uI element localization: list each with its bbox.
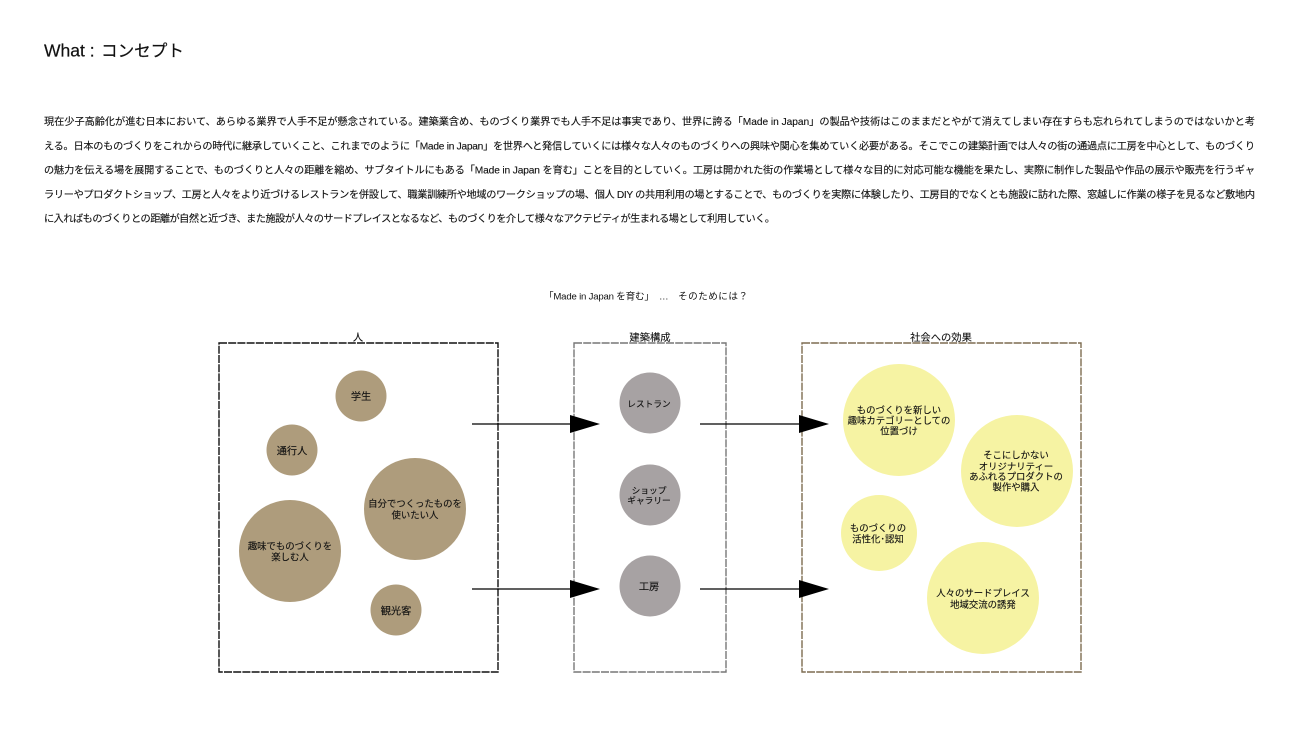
body text block [44,115,1255,225]
circle: passers-by: 通行人 [277,444,307,458]
circle: students [336,370,386,422]
circle: restaurant [620,372,680,434]
diagram question heading [544,290,748,302]
arrow: people to restaurant [472,415,600,433]
circle: workshop: 工房 [639,581,659,593]
body text block: ラリーやプロダクトショップ、工房と人々をより近づけるレストランを併設して、職業訓練所や地域のワークショップの場、個人 DIY の共用利用の場とすることで、ものづくりを実際に体験したり、工房目的でなくとも施設に訪れた際、窓越しに作業の様子を見るなど敷地内 [44,188,1255,201]
circle: tourists: 観光客 [381,604,411,618]
diagram question heading: そのためには？ [678,292,748,302]
circle: original products: オリジナリティー [979,461,1053,472]
diagram question heading: 「Made in Japan を育む」 [544,290,654,302]
circle: third place: 地域交流の誘発 [950,599,1016,610]
title: コンセプト [101,42,184,60]
circle: hobby makers [239,500,341,602]
body text block: 現在少子高齢化が進む日本において、あらゆる業界で人手不足が懸念されている。建築業含め、ものづくり業界でも人手不足は事実であり、世界に誇る「Made in Japan」の製品や技術はこのままだとやがて消えてしまい存在すらも忘れられてしまうのではないかと考 [44,115,1255,128]
circle: new hobby category: 位置づけ [880,426,918,436]
circle: third place: 人々のサードプレイス [936,588,1030,598]
circle: tourists [370,584,422,636]
circle: people who want to use what they make: 自分でつくったものを [368,498,462,509]
panel heading: architectural composition: 建築構成 [629,331,671,344]
circle: new hobby category: ものづくりを新しい [857,404,941,416]
circle: students: 学生 [351,390,371,403]
arrow: workshop to effects [700,580,829,598]
circle: original products [961,415,1073,527]
panel heading: people: 人 [353,332,364,344]
body text block: える。日本のものづくりをこれからの時代に継承していくこと、これまでのように「Made in Japan」を世界へと発信していくには様々な人々のものづくりへの興味や関心を集めていく必要がある。そこでこの建築計画では人々の街の通過点に工房を中心として、ものづくり [44,139,1255,152]
circle: new hobby category [843,364,955,476]
diagram question heading: … [659,292,669,302]
circle: people who want to use what they make: 使いたい人 [392,510,439,520]
circle: original products: 製作や購入 [993,482,1040,492]
circle: restaurant: レストラン [627,399,671,409]
circle: original products: あふれるプロダクトの [969,471,1063,482]
title: What : [44,40,95,60]
circle: third place [927,542,1039,654]
circle: revitalization and awareness [841,495,917,571]
circle: original products: そこにしかない [983,450,1049,460]
circle: revitalization and awareness: 活性化･認知 [852,534,904,544]
body text block: に入ればものづくりとの距離が自然と近づき、また施設が人々のサードプレイスとなるなど、ものづくりを介して様々なアクテビティが生まれる場として利用していく。 [44,212,775,225]
panel: architectural composition [574,331,726,672]
circle: hobby makers: 楽しむ人 [271,551,309,562]
panel heading: social effects: 社会への効果 [910,331,972,344]
circle: shop gallery: ショップ [632,486,667,496]
circle: shop gallery: ギャラリー [627,496,671,506]
circle: hobby makers: 趣味でものづくりを [248,541,332,552]
circle: workshop [620,556,680,616]
circle: new hobby category: 趣味カテゴリーとしての [848,415,950,426]
circle: revitalization and awareness: ものづくりの [850,522,906,534]
circle: people who want to use what they make [364,458,466,560]
circle: shop gallery [620,464,680,526]
panel: social effects [802,331,1081,672]
arrow: restaurant to effects [700,415,829,433]
arrow: people to workshop [472,580,600,598]
body text block: の魅力を伝える場を展開することで、ものづくりと人々の距離を縮め、サブタイトルにもある「Made in Japan を育む」ことを目的としていく。工房は開かれた街の作業場として様々な目的に対応可能な機能を果たし、実際に制作した製品や作品の展示や販売を行うギャ [44,164,1255,177]
panel: people [219,332,498,672]
circle: passers-by [266,424,318,476]
